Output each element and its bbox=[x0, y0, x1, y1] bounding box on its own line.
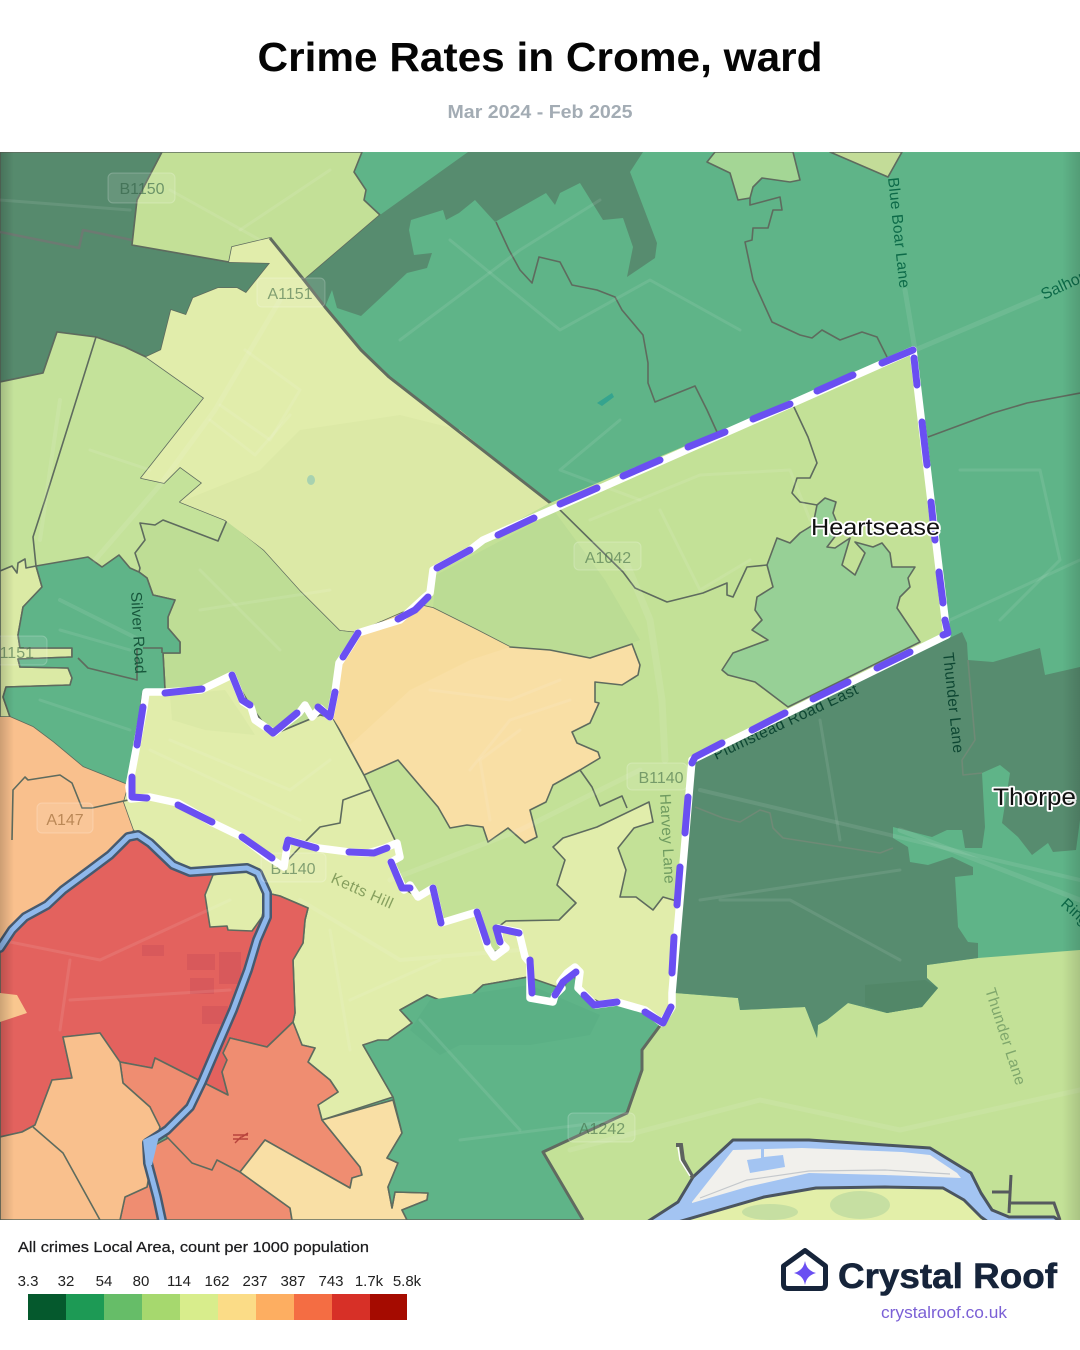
region: large yellow north ward bbox=[141, 238, 550, 632]
river Wensum bbox=[0, 835, 267, 1225]
region: Heartsease medium green bbox=[722, 498, 920, 707]
road label: Harvey Lane: Harvey Lane bbox=[656, 793, 678, 884]
choropleth map panel bbox=[0, 152, 1080, 1225]
road label: Ketts Hill: Ketts Hill bbox=[328, 870, 396, 912]
website url: crystalroof.co.uk bbox=[881, 1304, 1008, 1322]
region: north-east dark stripe bbox=[304, 152, 657, 316]
road label: Thunder Lane north: Thunder Lane bbox=[939, 652, 966, 754]
region: central light green bbox=[333, 350, 945, 960]
region: Silver Road green bbox=[3, 555, 180, 785]
region: south of river yellow bbox=[690, 1188, 982, 1220]
small lake bbox=[597, 393, 614, 406]
subtitle: date range: Mar 2024 - Feb 2025 bbox=[448, 101, 632, 122]
icon: house with star bbox=[784, 1250, 826, 1288]
road label: Silver Road: Silver Road bbox=[127, 591, 148, 674]
legend scale labels: 32 bbox=[58, 1273, 74, 1290]
north-east boundary lines bbox=[496, 197, 1080, 437]
region: south-east light green bbox=[543, 950, 1080, 1220]
region: top pale patches bbox=[707, 152, 902, 200]
region: north-west dark green bbox=[0, 152, 270, 382]
map edge vignette bbox=[0, 152, 1080, 1220]
title: Crime Rates in Crome, ward bbox=[258, 34, 822, 80]
region: west light green bbox=[0, 332, 226, 571]
place label: Heartsease: Heartsease bbox=[811, 514, 940, 540]
icon: railway station bbox=[233, 1133, 248, 1143]
logo: Crystal Roof bbox=[784, 1250, 1057, 1322]
ward boundary: Crome bbox=[129, 350, 948, 1023]
road shield: A1042: A1042 bbox=[585, 550, 631, 567]
legend scale labels: 743 bbox=[318, 1273, 344, 1290]
region: far west yellow-green bbox=[0, 559, 72, 717]
legend scale labels: 237 bbox=[242, 1273, 268, 1290]
road shield: A1151 west bbox=[0, 636, 47, 665]
legend title: All crimes Local Area, count per 1000 population bbox=[18, 1239, 369, 1256]
region: orange south-west bbox=[0, 1033, 160, 1220]
region: west inner green bbox=[134, 519, 322, 728]
road shield: A147 bbox=[37, 803, 93, 833]
region: pale blob inside river bend bbox=[204, 873, 262, 932]
legend scale labels: 162 bbox=[204, 1273, 230, 1290]
region: south mid green bbox=[363, 972, 662, 1220]
road shield: B1140 north bbox=[627, 763, 687, 790]
region: beige rail yards bbox=[240, 1100, 428, 1220]
faint road network bbox=[0, 170, 1080, 1150]
small pond bbox=[307, 475, 315, 485]
legend scale labels: 387 bbox=[280, 1273, 306, 1290]
road shield: B1150: B1150 bbox=[119, 181, 165, 198]
road shield: A1151 north bbox=[257, 278, 325, 307]
road shield: A147: A147 bbox=[46, 812, 84, 829]
place label: Thorpe: Thorpe bbox=[993, 784, 1076, 811]
legend scale labels: 54 bbox=[96, 1273, 112, 1290]
road shield: A1242: A1242 bbox=[579, 1121, 625, 1138]
legend scale labels: 5.8k bbox=[393, 1273, 422, 1290]
region: south-west ward and Ketts Hill yellow bbox=[123, 675, 680, 1120]
road shield: B1140 north: B1140 bbox=[638, 770, 684, 787]
legend scale labels bbox=[18, 1273, 422, 1290]
region: Thorpe dark green bbox=[675, 632, 1080, 1038]
region: red city centre bbox=[0, 835, 308, 1137]
wordmark: Crystal Roof bbox=[838, 1257, 1057, 1296]
road shield: B1140 south bbox=[261, 853, 326, 882]
road shield: B1140 south: B1140 bbox=[270, 861, 316, 878]
legend scale labels: 80 bbox=[133, 1273, 149, 1290]
road shield: B1150 bbox=[108, 173, 175, 203]
region: orange west bbox=[0, 717, 133, 948]
central boundary lines bbox=[555, 405, 817, 808]
road label: Blue Boar Lane: Blue Boar Lane bbox=[884, 177, 913, 289]
road shield: A1042 bbox=[574, 542, 641, 570]
ward boundary dashes bbox=[132, 350, 948, 1023]
legend scale labels: 1.7k bbox=[355, 1273, 384, 1290]
region: darker park green bbox=[433, 512, 640, 658]
legend colour bar bbox=[28, 1294, 407, 1320]
legend scale labels: 114 bbox=[167, 1273, 191, 1290]
legend scale labels: 3.3 bbox=[18, 1273, 38, 1290]
road shield: A1151 north: A1151 bbox=[267, 286, 313, 303]
road label: Thunder Lane south: Thunder Lane bbox=[981, 986, 1029, 1087]
road shield: A1242 bbox=[568, 1113, 635, 1142]
road label: Plumstead Road East: Plumstead Road East bbox=[711, 681, 862, 764]
region: north pale green bbox=[132, 152, 380, 280]
region: salmon station area bbox=[120, 1022, 362, 1220]
river Yare basin and island bbox=[647, 1140, 1061, 1222]
region: central beige bbox=[333, 605, 640, 843]
